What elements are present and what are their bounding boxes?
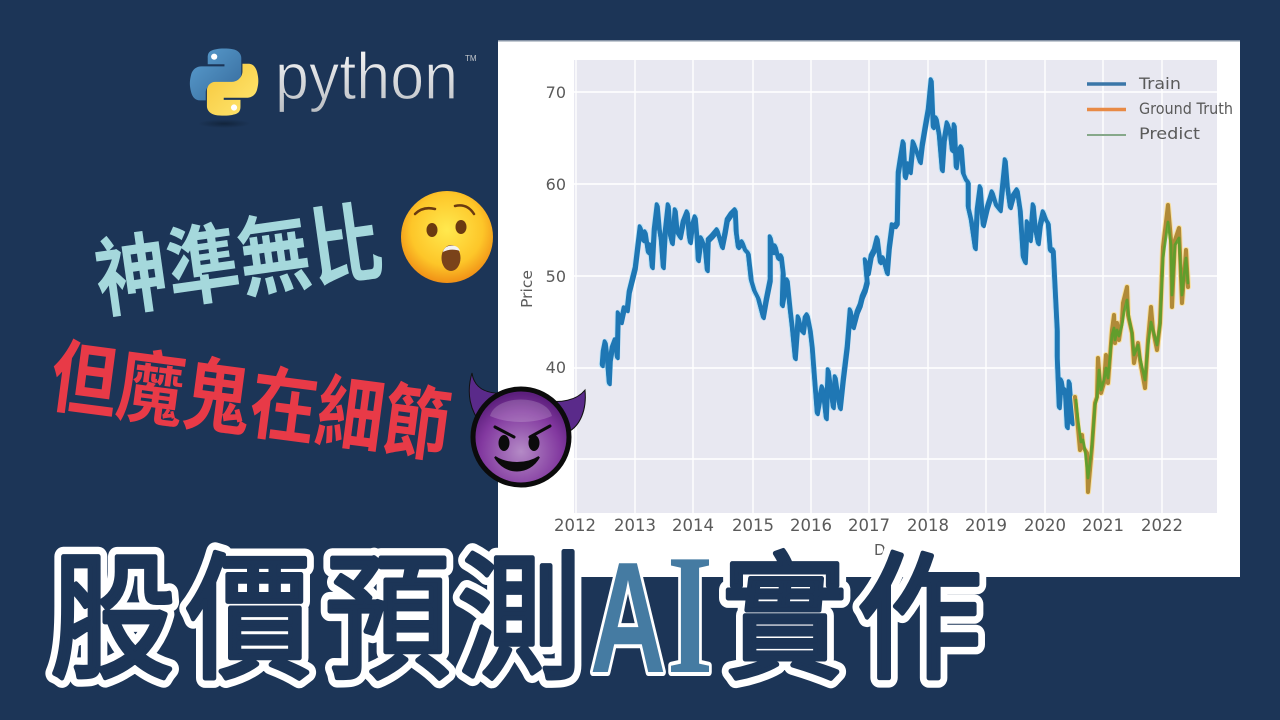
title: AI letters: I bbox=[667, 520, 713, 710]
callout: 但魔鬼在細節: 但魔鬼在細節 bbox=[45, 332, 456, 473]
title letters: 預 bbox=[325, 542, 450, 696]
x axis tick labels: 2020 bbox=[1024, 516, 1066, 535]
title outline: 股 bbox=[50, 542, 175, 696]
chart plot area bbox=[574, 60, 1217, 513]
python wordmark: python bbox=[275, 39, 458, 113]
y axis tick labels: 60 bbox=[546, 175, 566, 194]
icon: python snakes bbox=[190, 49, 258, 128]
callout: 神準無比: 神準無比 bbox=[90, 193, 388, 329]
x axis tick labels: 2021 bbox=[1082, 516, 1124, 535]
x axis tick labels: 2016 bbox=[790, 516, 832, 535]
y axis title: Price bbox=[518, 270, 536, 308]
x axis tick labels: 2017 bbox=[848, 516, 890, 535]
title outline: 測 bbox=[457, 542, 582, 696]
train price line bbox=[602, 79, 1076, 428]
trademark: TM bbox=[465, 54, 477, 63]
x axis tick labels: 2012 bbox=[554, 516, 596, 535]
x axis tick labels bbox=[554, 516, 1183, 535]
title letters bbox=[50, 542, 982, 696]
title letters: 價 bbox=[186, 542, 311, 696]
y axis tick labels: 40 bbox=[546, 358, 566, 377]
x axis tick labels: 2015 bbox=[732, 516, 774, 535]
legend: Ground Truth bbox=[1139, 99, 1233, 118]
title: AI outline: I bbox=[667, 520, 713, 710]
title letters: 作 bbox=[857, 542, 982, 696]
title: AI letters: A bbox=[590, 530, 666, 706]
title bbox=[50, 520, 982, 710]
title outline: 價 bbox=[186, 542, 311, 696]
y axis tick labels bbox=[546, 83, 566, 377]
title letters: 實 bbox=[722, 542, 847, 696]
legend: Train bbox=[1138, 74, 1181, 93]
legend: Predict bbox=[1139, 124, 1200, 143]
title letters: 測 bbox=[457, 542, 582, 696]
x axis tick labels: 2014 bbox=[672, 516, 714, 535]
ground truth and prediction lines bbox=[1075, 205, 1188, 492]
legend bbox=[1087, 74, 1233, 143]
icon: surprised face bbox=[401, 191, 493, 283]
title outline: 預 bbox=[325, 542, 450, 696]
x axis tick labels: 2022 bbox=[1141, 516, 1183, 535]
title outline: 作 bbox=[857, 542, 982, 696]
title letters: 股 bbox=[50, 542, 175, 696]
y axis tick labels: 50 bbox=[546, 267, 566, 286]
title outline bbox=[50, 542, 982, 696]
icon: smiling devil bbox=[469, 373, 585, 485]
title outline: 實 bbox=[722, 542, 847, 696]
panel: stock price chart bbox=[498, 40, 1240, 577]
python logo bbox=[190, 39, 477, 128]
x axis tick labels: 2018 bbox=[907, 516, 949, 535]
title: AI outline: A bbox=[590, 530, 666, 706]
x axis tick labels: 2013 bbox=[614, 516, 656, 535]
x axis tick labels: 2019 bbox=[965, 516, 1007, 535]
x axis title: Da bbox=[874, 541, 895, 559]
y axis tick labels: 70 bbox=[546, 83, 566, 102]
